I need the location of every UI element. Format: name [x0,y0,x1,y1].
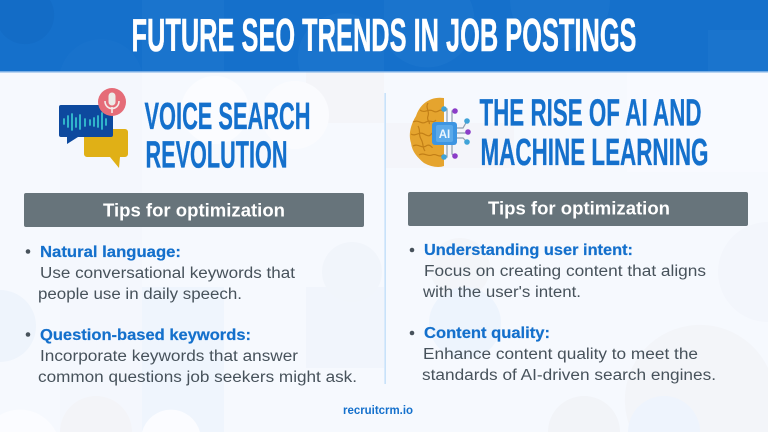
tip: natural language: Use conversational keywords that [40,265,296,282]
tip: understanding user intent: Focus on creating content that aligns [424,263,706,280]
tip: question-based keywords: Incorporate keywords that answer [40,348,298,365]
tip: understanding user intent: Understanding user intent: [424,242,633,259]
icon: ai brain: AI [439,129,450,141]
icon: voice chat bubbles [59,88,128,168]
tips bar left [24,193,364,227]
footer brand: recruitcrm.io [343,405,413,417]
tip: question-based keywords [26,327,357,386]
center divider [384,93,386,384]
tip: content quality: Content quality: [424,325,550,342]
tip: content quality: standards of AI-driven search engines. [422,367,716,384]
tip: question-based keywords: common questions job seekers might ask. [38,369,357,386]
tips bar left: Tips for optimization [103,200,285,220]
heading: voice search revolution [144,96,310,176]
tip: content quality: Enhance content quality to meet the [423,346,698,363]
tip: natural language: Natural language: [40,244,181,261]
icon: ai brain [410,98,471,167]
tips bar right [408,192,748,226]
tip: natural language [26,244,296,303]
tip: understanding user intent: with the user's intent. [422,284,581,301]
tip: question-based keywords: Question-based keywords: [40,327,251,344]
heading: rise of ai and machine learning [480,92,708,174]
heading: voice search revolution: VOICE SEARCH [144,96,310,138]
header band [0,0,768,72]
panel: voice search [24,88,364,386]
panel: ai and machine learning [408,92,748,384]
heading: voice search revolution: REVOLUTION [146,134,288,176]
tip: content quality [410,325,716,384]
tips bar right: Tips for optimization [488,198,670,218]
tip: understanding user intent [410,242,706,301]
tip: natural language: people use in daily speech. [38,286,242,303]
